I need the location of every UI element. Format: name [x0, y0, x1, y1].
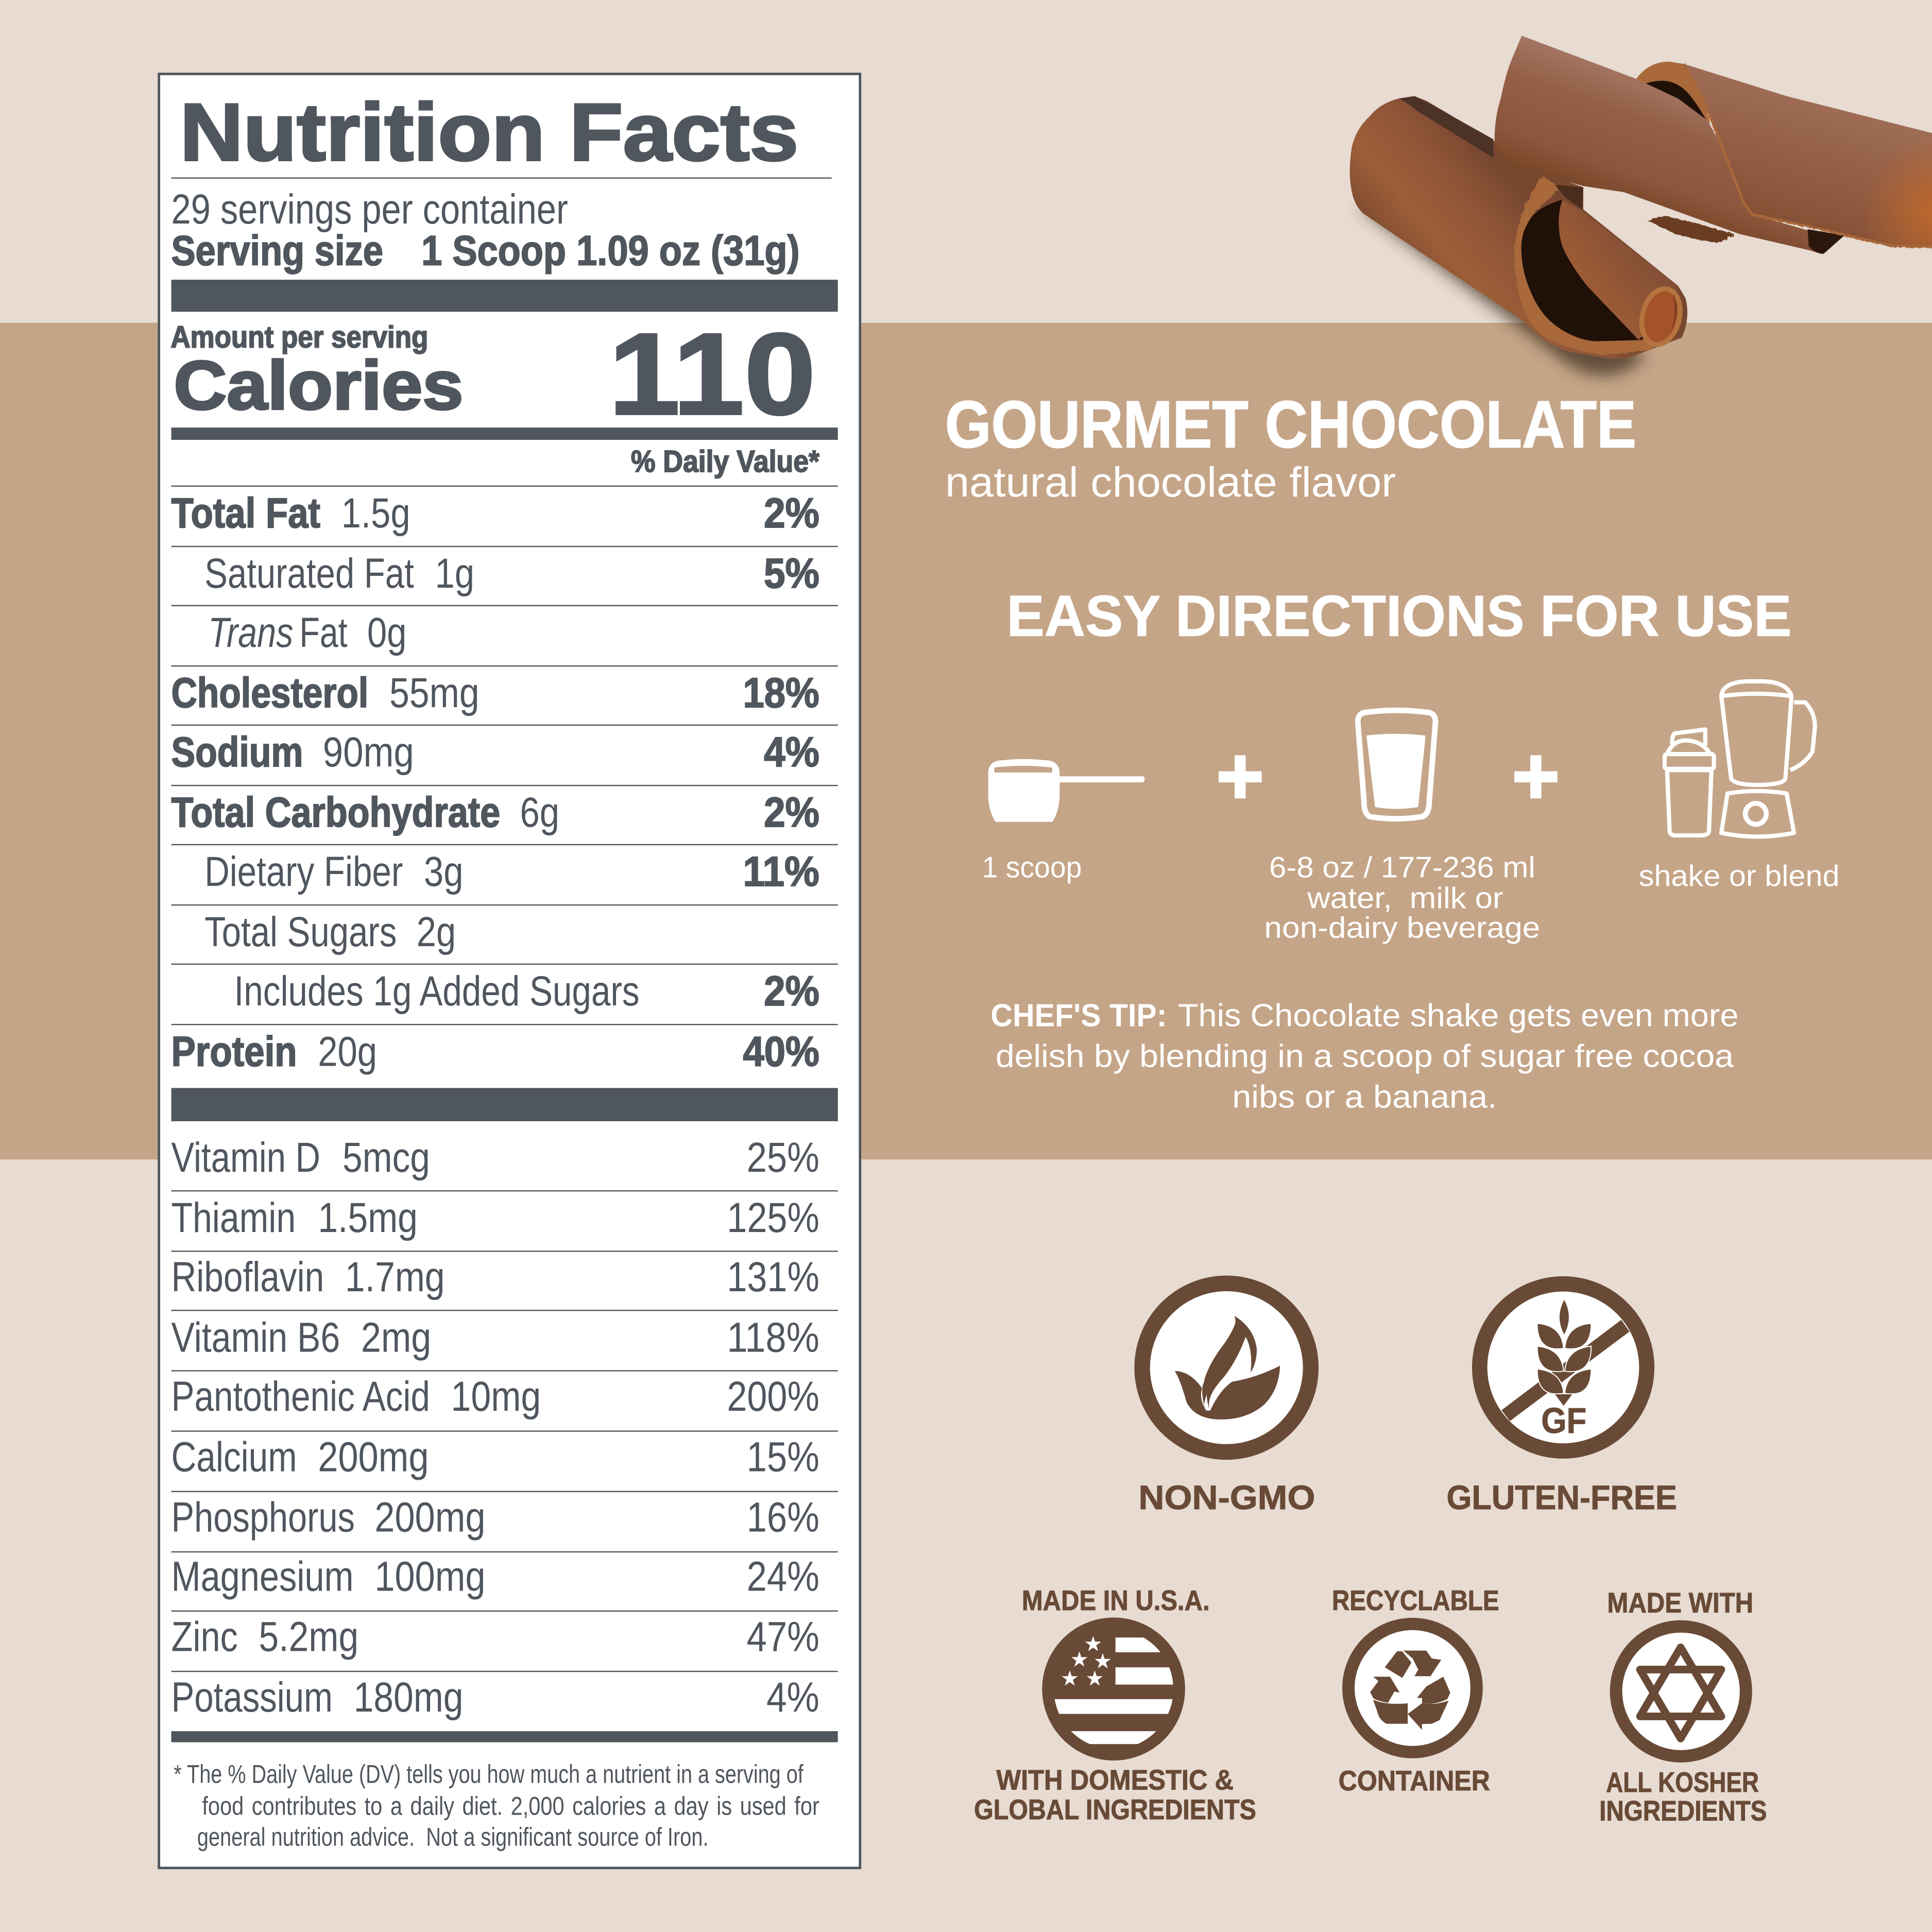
icon: shaker and blender — [1665, 681, 1815, 836]
left curl lip — [1514, 176, 1666, 355]
heading: gourmet chocolate: GOURMET CHOCOLATE — [945, 387, 1636, 461]
row: zinc: 47% — [747, 1614, 819, 1661]
icon: flag circle: ★ — [1085, 1666, 1104, 1691]
icon: wheat — [1537, 1300, 1591, 1406]
row: cholesterol: 18% — [743, 670, 819, 716]
row: potassium: 4% — [766, 1674, 819, 1721]
badge: made in usa — [974, 1584, 1256, 1825]
footnote: general nutrition advice. Not a significant source of Iron. — [197, 1823, 709, 1852]
label: liquid amount: water, milk or — [1307, 882, 1503, 915]
icon: scoop — [988, 759, 1144, 822]
row: thiamin: 1.5mg — [318, 1194, 418, 1241]
row: total fat — [172, 490, 819, 537]
row: calcium: 15% — [747, 1433, 819, 1480]
row: total carbohydrate: 6g — [520, 789, 559, 836]
left chocolate curl — [1350, 96, 1687, 359]
row: vitamin b6 — [172, 1314, 819, 1361]
row: added sugars: Includes 1g Added Sugars — [234, 968, 640, 1015]
row: vitamin b6: 118% — [727, 1314, 819, 1361]
label: non-gmo: NON-GMO — [1138, 1478, 1315, 1516]
chef's tip: delish by blending in a scoop of sugar free cocoa — [996, 1039, 1734, 1074]
icon: flag circle: ★ — [1070, 1647, 1089, 1671]
chef's tip: nibs or a banana. — [1232, 1080, 1497, 1115]
chef's tip: CHEF'S TIP: — [990, 998, 1167, 1034]
label: all kosher ingredients — [1599, 1766, 1767, 1826]
thick bar — [172, 280, 838, 312]
icon: plus 1 — [1219, 755, 1262, 798]
heading: directions: EASY DIRECTIONS FOR USE — [1006, 583, 1791, 648]
top roll sheet — [1495, 36, 1821, 254]
row: total carbohydrate: Total Carbohydrate — [172, 789, 500, 836]
row: calcium: Calcium — [172, 1433, 297, 1480]
row: total fat: 2% — [764, 490, 819, 537]
icon: flag circle: ★ — [1061, 1666, 1079, 1691]
row: zinc — [172, 1614, 819, 1661]
icon: leaf — [1175, 1316, 1280, 1420]
left curl dark top edge — [1398, 96, 1493, 158]
row: sodium: 90mg — [323, 729, 414, 776]
row: sodium: Sodium — [172, 729, 303, 776]
row: phosphorus: 200mg — [374, 1494, 486, 1541]
row: vitamin b6: 2mg — [361, 1314, 431, 1361]
panel background — [159, 74, 860, 1868]
row: saturated fat: 1g — [435, 550, 474, 597]
row: protein: 40% — [743, 1028, 819, 1075]
row: magnesium: 24% — [747, 1553, 819, 1600]
row: phosphorus: Phosphorus — [172, 1494, 355, 1541]
row: cholesterol: 55mg — [389, 670, 480, 716]
label: liquid amount: non-dairy beverage — [1264, 911, 1540, 944]
row: trans fat: Fat — [299, 609, 348, 656]
row: total carbohydrate — [172, 789, 819, 836]
recycling ring — [1348, 1624, 1477, 1752]
row: saturated fat: Saturated Fat — [204, 550, 414, 597]
row: saturated fat — [204, 550, 819, 597]
row: protein: Protein — [172, 1028, 297, 1075]
GF mark: GF — [1541, 1400, 1586, 1441]
row: total sugars: Total Sugars — [204, 909, 397, 955]
footnote: * The % Daily Value (DV) tells you how much a nutrient in a serving of — [174, 1760, 804, 1789]
serving size — [172, 227, 800, 274]
row: vitamin d: 5mcg — [343, 1134, 430, 1181]
thick bar — [172, 428, 838, 440]
icon: flag circle: ★ — [1093, 1649, 1112, 1673]
row: total sugars: 2g — [417, 909, 456, 955]
non-gmo ring — [1142, 1284, 1311, 1452]
badge: recyclable — [1332, 1584, 1499, 1797]
row: thiamin — [172, 1194, 819, 1241]
label: gluten-free: GLUTEN-FREE — [1446, 1478, 1677, 1516]
label: all kosher ingredients: INGREDIENTS — [1599, 1794, 1767, 1826]
subheading: flavor: natural chocolate flavor — [945, 459, 1396, 506]
serving size: 1 Scoop 1.09 oz (31g) — [421, 227, 800, 274]
icon: plus 2 — [1514, 755, 1558, 798]
left curl back lip — [1555, 185, 1583, 210]
chef's tip: This Chocolate shake gets even more — [1178, 998, 1738, 1034]
label: shake or blend: shake or blend — [1639, 860, 1840, 893]
row: protein — [172, 1028, 819, 1075]
kosher ring — [1616, 1627, 1746, 1756]
row: zinc: 5.2mg — [259, 1614, 358, 1661]
thick bar — [172, 1088, 838, 1121]
inner curl sheet — [1559, 200, 1678, 340]
row: cholesterol — [172, 670, 819, 716]
top roll spiral lip — [1636, 62, 1710, 123]
badge: non-gmo — [1138, 1284, 1315, 1516]
row: calcium: 200mg — [318, 1433, 429, 1480]
row: potassium: Potassium — [172, 1674, 333, 1721]
chef's tip — [990, 998, 1738, 1115]
label: liquid amount: 6-8 oz / 177-236 ml — [1269, 851, 1535, 884]
daily value header: % Daily Value* — [631, 444, 819, 478]
servings per container: 29 servings per container — [172, 186, 568, 233]
row: sodium — [172, 729, 819, 776]
badge: gluten-free — [1446, 1284, 1677, 1516]
row: added sugars: 2% — [764, 968, 819, 1015]
label: made with: MADE WITH — [1607, 1587, 1753, 1619]
row: pantothenic acid: 10mg — [451, 1373, 541, 1420]
shaker — [1665, 729, 1714, 835]
row: phosphorus: 16% — [747, 1494, 819, 1541]
icon: flag circle: ★ — [1084, 1632, 1103, 1656]
tan band — [0, 323, 1932, 1159]
label: liquid amount — [1264, 851, 1540, 944]
top roll right wrap — [1684, 64, 1932, 246]
row: dietary fiber — [204, 848, 819, 895]
label: domestic and global: WITH DOMESTIC & — [996, 1764, 1234, 1796]
row: riboflavin: Riboflavin — [172, 1254, 324, 1301]
row: zinc: Zinc — [172, 1614, 238, 1661]
label: domestic and global: GLOBAL INGREDIENTS — [974, 1793, 1256, 1825]
row: riboflavin: 1.7mg — [345, 1254, 445, 1301]
slash — [1501, 1320, 1630, 1421]
row: riboflavin — [172, 1254, 819, 1301]
row: trans fat: Trans — [208, 609, 293, 656]
row: thiamin: 125% — [727, 1194, 819, 1241]
label: 1 scoop: 1 scoop — [982, 851, 1082, 884]
row: pantothenic acid — [172, 1373, 819, 1420]
row: total carbohydrate: 2% — [764, 789, 819, 836]
curl hollow — [1636, 285, 1686, 349]
curl hollow fold — [1666, 293, 1677, 340]
icon: recycling arrows — [1370, 1651, 1450, 1730]
icon: glass of liquid — [1358, 710, 1435, 819]
heading: Nutrition Facts: Nutrition Facts — [180, 87, 798, 178]
label: made in usa: MADE IN U.S.A. — [1022, 1584, 1210, 1616]
row: vitamin d — [172, 1134, 819, 1181]
badge: kosher — [1599, 1587, 1767, 1826]
top roll spiral hollow — [1645, 81, 1708, 123]
row: trans fat — [208, 609, 406, 656]
row: total fat: 1.5g — [341, 490, 411, 537]
thick bar — [172, 1731, 838, 1742]
row: magnesium: 100mg — [374, 1553, 486, 1600]
panel: nutrition facts label — [159, 74, 860, 1868]
row: thiamin: Thiamin — [172, 1194, 296, 1241]
row: vitamin b6: Vitamin B6 — [172, 1314, 340, 1361]
calories value: 110 — [609, 309, 816, 439]
calories label: Calories — [174, 347, 463, 424]
footnote: food contributes to a daily diet. 2,000 calories a day is used for — [202, 1792, 819, 1821]
gluten-free ring — [1480, 1284, 1647, 1451]
row: pantothenic acid: Pantothenic Acid — [172, 1373, 430, 1420]
row: trans fat: 0g — [367, 609, 406, 656]
row: phosphorus — [172, 1494, 819, 1541]
row: dietary fiber: 11% — [743, 848, 819, 895]
left curl interior — [1521, 200, 1651, 341]
row: riboflavin: 131% — [727, 1254, 819, 1301]
label: container: CONTAINER — [1339, 1765, 1490, 1797]
row: magnesium — [172, 1553, 819, 1600]
row: vitamin d: Vitamin D — [172, 1134, 320, 1181]
chocolate shadow — [1358, 207, 1646, 375]
icon: star of david — [1640, 1647, 1721, 1738]
row dividers — [172, 486, 838, 1672]
serving size: Serving size — [172, 227, 383, 274]
icon: flag circle — [1042, 1618, 1185, 1760]
right wrap glow — [1848, 123, 1932, 246]
label: all kosher ingredients: ALL KOSHER — [1606, 1766, 1759, 1798]
row: vitamin d: 25% — [747, 1134, 819, 1181]
rule under heading — [172, 177, 832, 179]
crumbly wrap edge — [1684, 64, 1932, 246]
row: potassium: 180mg — [354, 1674, 463, 1721]
row: dietary fiber: Dietary Fiber — [204, 848, 403, 895]
row: cholesterol: Cholesterol — [172, 670, 368, 716]
footnote — [174, 1760, 819, 1852]
row: pantothenic acid: 200% — [727, 1373, 819, 1420]
row: protein: 20g — [318, 1028, 377, 1075]
amount per serving: Amount per serving — [170, 320, 428, 354]
row: dietary fiber: 3g — [424, 848, 463, 895]
row: calcium — [172, 1433, 819, 1480]
blender — [1721, 681, 1815, 836]
row: total fat: Total Fat — [172, 490, 320, 537]
row: sodium: 4% — [764, 729, 819, 776]
image: chocolate curls — [1350, 36, 1932, 375]
row: magnesium: Magnesium — [172, 1553, 354, 1600]
roll bottom opening — [1807, 229, 1844, 254]
chocolate crumb — [1647, 216, 1735, 243]
label: recyclable: RECYCLABLE — [1332, 1584, 1499, 1616]
row: potassium — [172, 1674, 819, 1721]
row: saturated fat: 5% — [764, 550, 819, 597]
label: domestic and global — [974, 1764, 1256, 1825]
